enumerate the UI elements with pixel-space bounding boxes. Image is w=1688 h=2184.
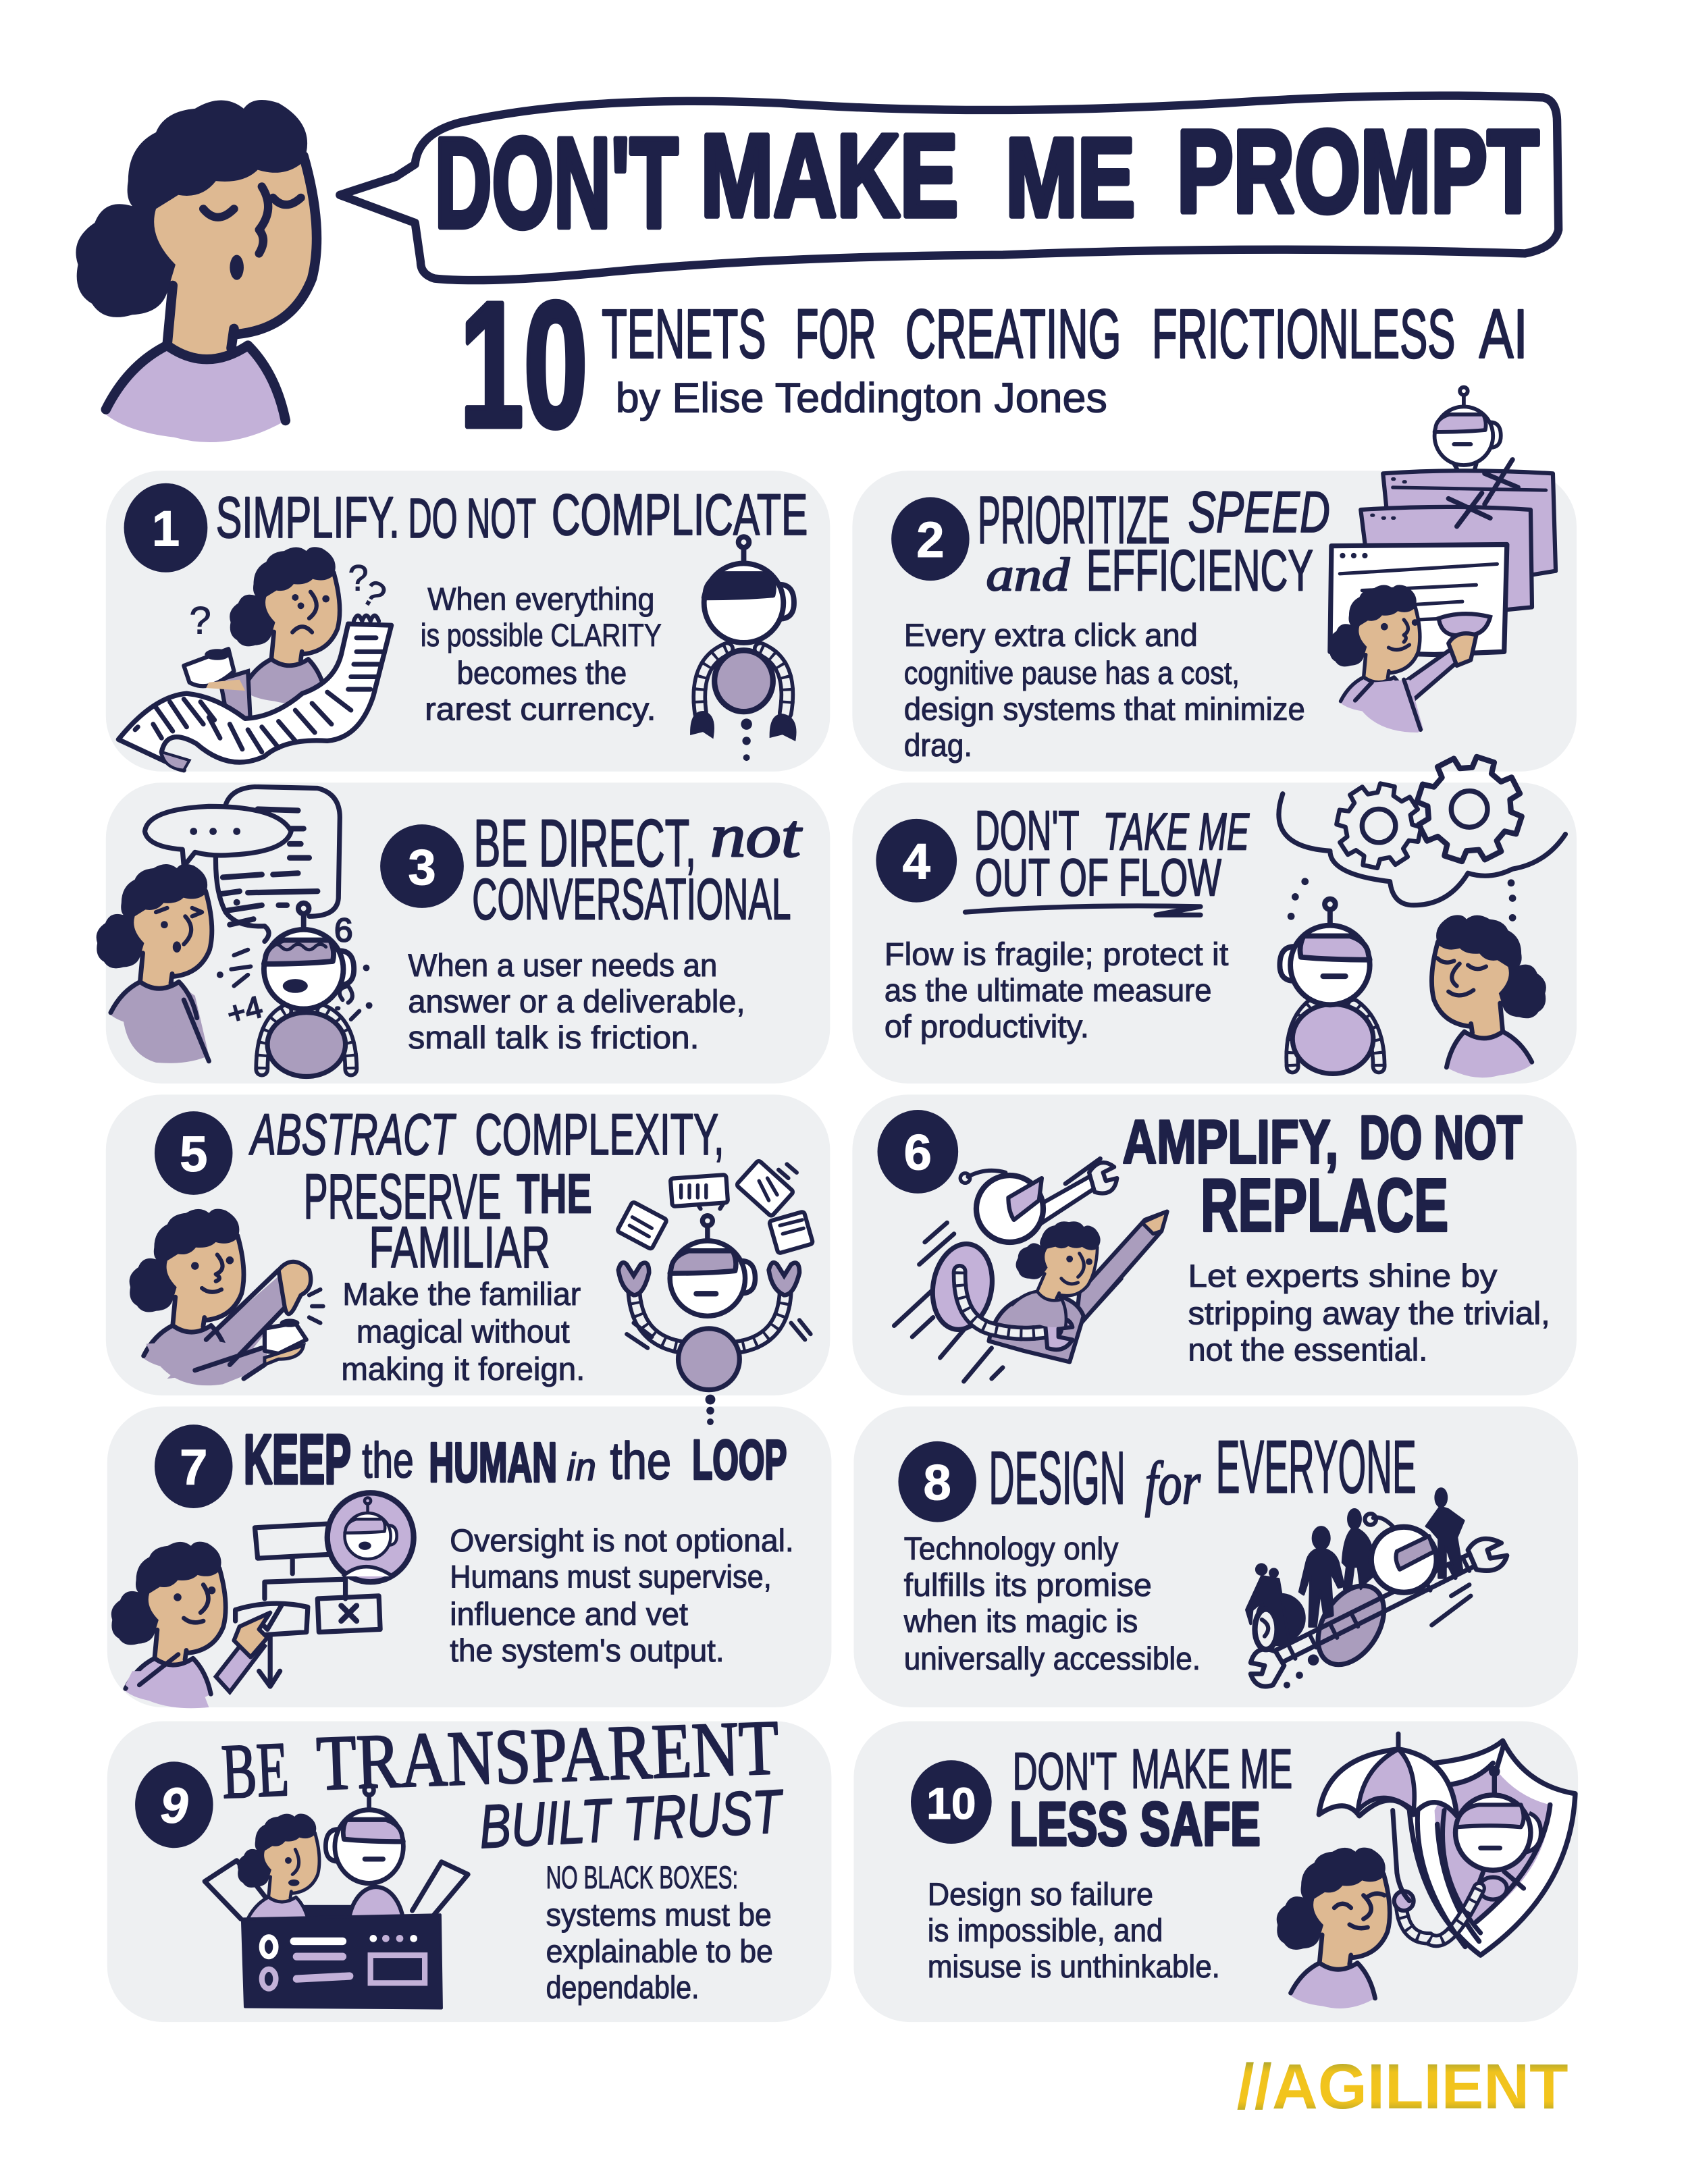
title: PROMPT (1177, 106, 1539, 237)
heading 9: BE (220, 1726, 290, 1815)
illustration: thought cloud with gears (1279, 743, 1565, 922)
badge 9: 9 (160, 1778, 188, 1834)
heading 4: TAKE ME (1103, 801, 1250, 861)
panel 1: simplify (106, 471, 830, 772)
body 5: making it foreign. (341, 1352, 585, 1387)
heading 10 (1009, 1738, 1292, 1859)
heading 4 (965, 799, 1250, 915)
body 8 (903, 1531, 1201, 1677)
title (435, 106, 1539, 255)
heading 9 (220, 1704, 786, 1861)
illustration: small robot (1435, 387, 1501, 473)
heading 5: THE (517, 1163, 592, 1225)
panel 9 background (107, 1722, 831, 2022)
heading 6: REPLACE (1201, 1163, 1448, 1247)
illustration: woman with long scroll: ? (190, 600, 211, 643)
logo: Agilient: //AGILIENT (1237, 2051, 1568, 2123)
juggling robot trailing dots (706, 1395, 715, 1425)
heading 1: SIMPLIFY. (216, 485, 400, 550)
panel 3: direct (97, 782, 830, 1084)
badge 4: 4 (903, 834, 930, 890)
dark box (242, 1915, 442, 2008)
body 6: not the essential. (1188, 1332, 1427, 1368)
body 9 (546, 1860, 773, 2006)
illustration: juggling robot (617, 1160, 813, 1390)
heading 5: COMPLEXITY, (475, 1102, 724, 1167)
heading 8: DESIGN (989, 1436, 1126, 1520)
heading 3: CONVERSATIONAL (472, 867, 791, 932)
heading 10: DON'T (1013, 1742, 1117, 1801)
panel 6: amplify (852, 1094, 1577, 1395)
body 3 (408, 948, 745, 1056)
illustration: woman with long scroll: ? (348, 558, 369, 599)
body 9: NO BLACK BOXES: (546, 1860, 738, 1896)
standing silhouettes (1300, 1489, 1464, 1626)
heading 5: FAMILIAR (369, 1215, 550, 1280)
body 8: universally accessible. (904, 1641, 1201, 1677)
body 2 (904, 618, 1305, 764)
body 10 (928, 1877, 1220, 1985)
subtitle: TENETS (602, 295, 766, 373)
shield (1398, 1740, 1575, 1955)
illustration: talking robot 3: 6 (334, 911, 353, 949)
illustration: people on robot wrench (1246, 1489, 1507, 1688)
panel 2 background (852, 471, 1577, 772)
badge 7 (155, 1424, 232, 1508)
robot (1456, 1766, 1541, 1900)
wheelchair user (1246, 1563, 1304, 1649)
illustration: robot 1 (692, 537, 794, 761)
heading 8: for (1145, 1449, 1201, 1518)
badge 10: 10 (926, 1778, 976, 1828)
badge 9 (135, 1761, 213, 1848)
body 9: dependable. (546, 1970, 699, 2006)
illustration: decision flowchart (236, 1493, 414, 1686)
badge 1: 1 (152, 501, 180, 557)
body 5: Make the familiar (342, 1277, 581, 1312)
body 7: Humans must supervise, (450, 1560, 772, 1595)
badge 7: 7 (180, 1439, 207, 1495)
heading 5: ABSTRACT (248, 1102, 456, 1167)
body 3: When a user needs an (408, 948, 717, 984)
heading 1: COMPLICATE (552, 483, 808, 548)
badge 5: 5 (180, 1126, 207, 1182)
heading 6 (1123, 1104, 1523, 1247)
panel 10 background (853, 1722, 1578, 2022)
heading 2: PRIORITIZE (978, 482, 1170, 557)
illustration: long robot speech bubble (215, 787, 340, 941)
body 7: Oversight is not optional. (450, 1523, 794, 1559)
illustration: talking robot 3: +4 (223, 989, 266, 1032)
body 7: the system's output. (450, 1633, 724, 1669)
subtitle: FOR (795, 295, 876, 373)
body 7: influence and vet (450, 1597, 688, 1632)
heading 1: DO NOT (408, 487, 536, 550)
body 5: magical without (357, 1314, 570, 1350)
heading 1 (216, 483, 808, 550)
subtitle: 10 (460, 265, 587, 464)
panel 8: design for everyone: EVERYONE (1216, 1424, 1417, 1509)
body 2: cognitive pause has a cost, (904, 656, 1240, 691)
heading 6: DO NOT (1359, 1104, 1523, 1172)
badge 8: 8 (924, 1455, 951, 1511)
body 8: fulfills its promise (904, 1568, 1152, 1603)
heading 10: LESS SAFE (1009, 1790, 1261, 1859)
panel 4: flow (852, 743, 1577, 1084)
robot head (1365, 1514, 1437, 1593)
heading 4: OUT OF FLOW (975, 847, 1221, 907)
heading 7: HUMAN (429, 1432, 557, 1494)
illustration: woman 4 (1431, 915, 1546, 1077)
panel 6 background (852, 1094, 1577, 1395)
badge 6 (878, 1110, 958, 1194)
heading 4: DON'T (975, 799, 1080, 861)
heading 7: the (610, 1431, 671, 1491)
subtitle: CREATING (905, 295, 1121, 373)
body 2: design systems that minimize (904, 691, 1305, 727)
illustration: woman with long scroll (118, 547, 393, 770)
body 6 (1188, 1258, 1550, 1368)
badge 3: 3 (408, 839, 436, 895)
body 10: is impossible, and (928, 1913, 1163, 1948)
heading 5: PRESERVE (304, 1161, 502, 1233)
body 1: becomes the (457, 656, 627, 691)
illustration: talking robot 3 (217, 899, 373, 1077)
title: DON'T (435, 111, 679, 255)
body 8: Technology only (904, 1531, 1119, 1567)
heading 7: KEEP (244, 1420, 351, 1498)
body 9: systems must be (546, 1898, 772, 1934)
panel 5: abstract (106, 1094, 830, 1395)
body 9: explainable to be (546, 1934, 773, 1969)
heading 2 (978, 480, 1330, 604)
illustration: robot 4 (1280, 899, 1379, 1073)
heading 7 (244, 1420, 787, 1498)
illustration: short speech bubble (145, 806, 291, 866)
illustration: woman 3 (97, 864, 212, 1063)
badge 6: 6 (904, 1125, 932, 1181)
title speech bubble (340, 96, 1558, 280)
heading 5 (248, 1102, 724, 1280)
heading 7: LOOP (692, 1429, 787, 1491)
badge 2 (891, 497, 970, 581)
subtitle: AI (1479, 295, 1528, 373)
panel 3 background (106, 782, 830, 1084)
body 1: When everything (427, 581, 654, 617)
body 6: Let experts shine by (1188, 1258, 1498, 1294)
heading 2: EFFICIENCY (1086, 539, 1313, 604)
body 3: answer or a deliverable, (408, 984, 745, 1020)
body 1: is possible CLARITY (421, 618, 662, 654)
heading 7: in (567, 1446, 596, 1489)
heading 7: the (362, 1433, 414, 1489)
body 10: Design so failure (928, 1877, 1153, 1913)
subtitle: FRICTIONLESS (1152, 295, 1456, 373)
subtitle (460, 265, 1528, 464)
panel 9: transparent (107, 1704, 831, 2022)
body 1: rarest currency. (425, 691, 656, 727)
body 6: stripping away the trivial, (1188, 1296, 1550, 1332)
panel 7: human in the loop (107, 1406, 831, 1708)
panel 4 background (852, 782, 1577, 1084)
body 5 (341, 1277, 585, 1387)
badge 1 (124, 483, 207, 572)
body 4: as the ultimate measure (885, 973, 1212, 1009)
panel 7 background (107, 1406, 831, 1707)
body 4 (885, 936, 1228, 1045)
illustration: woman 10 (1277, 1848, 1390, 2008)
heading 6: AMPLIFY, (1123, 1108, 1338, 1176)
body 3: small talk is friction. (408, 1020, 699, 1056)
panel 2: speed (852, 387, 1577, 772)
illustration: stacked windows and woman (1329, 460, 1556, 733)
heading 9: BUILT TRUST (477, 1778, 786, 1861)
heading 10: MAKE ME (1131, 1738, 1292, 1801)
ladder arm (1394, 1888, 1479, 1941)
illustration: woman and robot in open box (205, 1785, 468, 2008)
umbrella (1319, 1734, 1457, 1901)
heading 2: SPEED (1188, 480, 1330, 545)
heading 8 (989, 1424, 1417, 1520)
body 10: misuse is unthinkable. (928, 1949, 1220, 1985)
body 8: when its magic is (903, 1604, 1138, 1640)
illustration: woman sprinkling magic (130, 1209, 323, 1385)
subtitle: by Elise Teddington Jones (616, 375, 1107, 422)
body 7 (450, 1523, 794, 1669)
badge 8 (898, 1441, 976, 1522)
body 4: of productivity. (885, 1009, 1089, 1045)
badge 3 (380, 824, 464, 908)
panel 8 background (853, 1406, 1578, 1707)
illustration: woman 7 pointing (111, 1542, 270, 1708)
body 4: Flow is fragile; protect it (885, 936, 1228, 972)
panel 10: safety (853, 1722, 1578, 2022)
body 2: drag. (904, 728, 972, 764)
heading 9: TRANSPARENT (315, 1704, 781, 1807)
heading 2: and (986, 550, 1070, 602)
title: MAKE (701, 110, 958, 241)
panel 5 background (106, 1094, 830, 1395)
header: woman portrait (76, 100, 317, 442)
body 1 (421, 581, 662, 727)
panel 8: design for everyone (853, 1406, 1578, 1707)
badge 5 (155, 1111, 232, 1195)
badge 2: 2 (916, 512, 945, 568)
heading 3: BE DIRECT, (473, 805, 696, 880)
panel 1 background (106, 471, 830, 772)
robot portrait medallion (327, 1493, 414, 1582)
badge 4 (876, 819, 957, 903)
body 2: Every extra click and (904, 618, 1198, 654)
illustration: robot lifting woman (894, 1158, 1167, 1381)
illustration: shield and umbrella (1319, 1734, 1575, 1955)
title: ME (1005, 115, 1135, 240)
heading 3: not (710, 802, 803, 870)
heading 3 (472, 802, 803, 932)
illustration: woman with long scroll: ? (355, 572, 393, 617)
badge 10 (911, 1760, 992, 1844)
